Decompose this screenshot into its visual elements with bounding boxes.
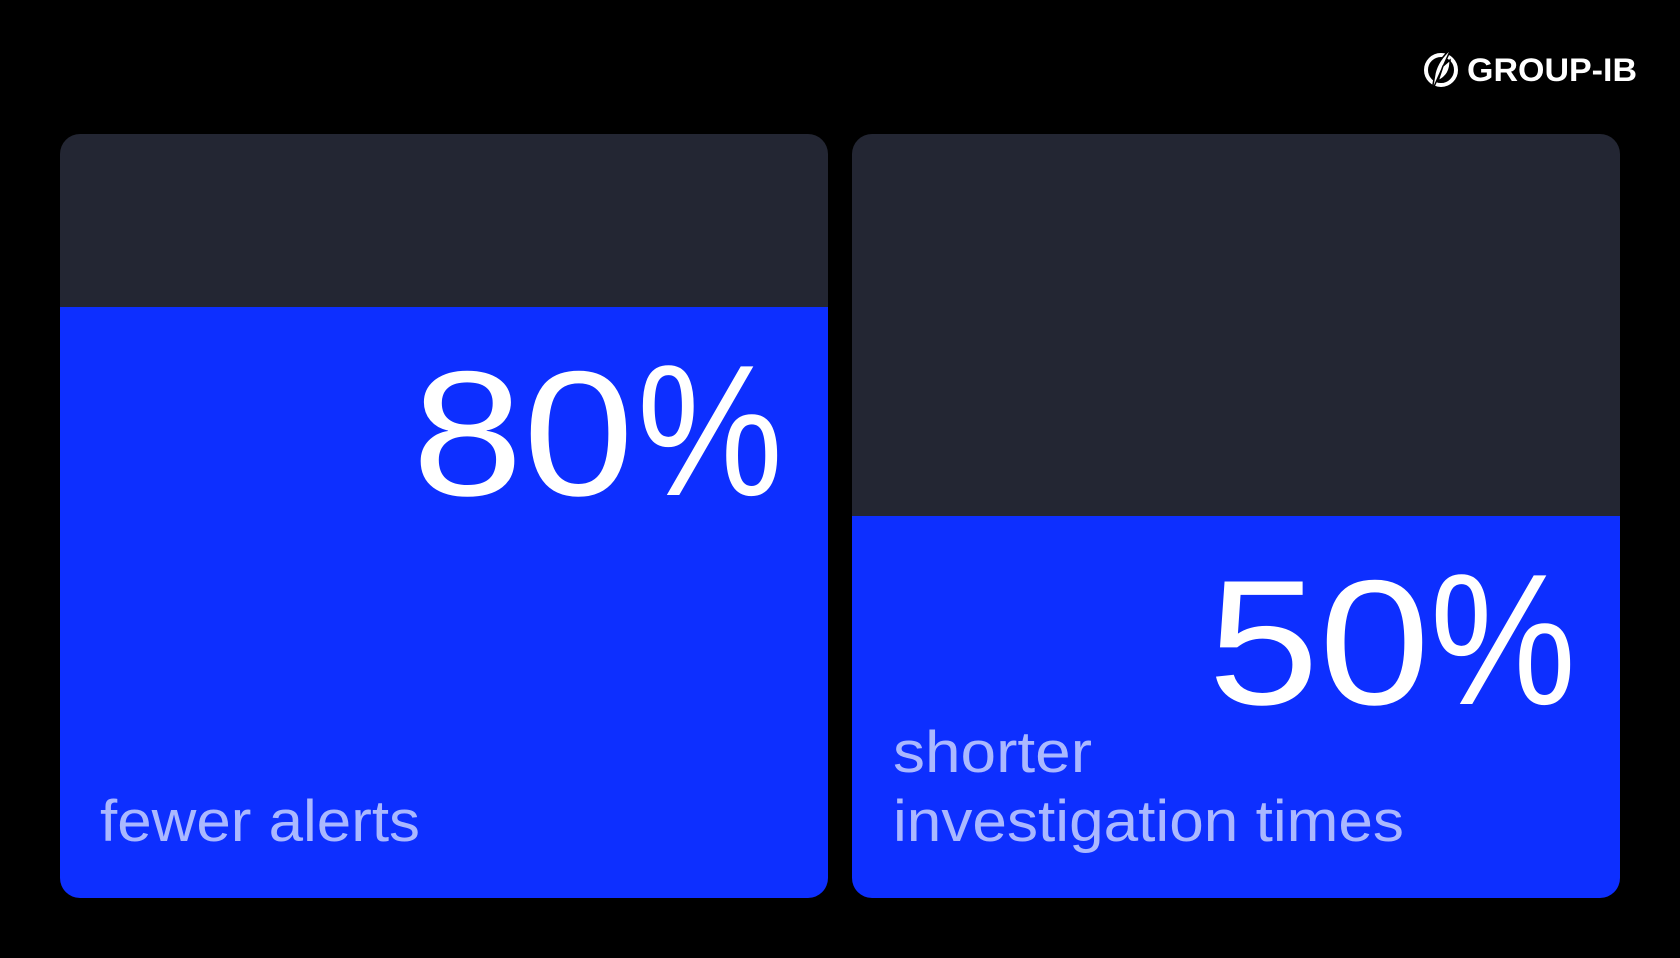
panel track xyxy=(852,134,1620,516)
big number 50%: % xyxy=(1430,535,1576,744)
panel track xyxy=(60,134,828,307)
bar fill 80% xyxy=(60,307,828,898)
label: fewer alerts: fewer alerts xyxy=(100,789,420,854)
big number 80% xyxy=(412,326,783,535)
label: shorter investigation times xyxy=(893,720,1404,854)
logo: Group-IB xyxy=(1426,49,1637,91)
icon: logo mark xyxy=(1426,49,1456,91)
big number 50%: 50 xyxy=(1208,543,1430,742)
label: shorter investigation times: investigation times xyxy=(893,789,1404,854)
big number 50% xyxy=(1208,535,1576,744)
panel: shorter investigation times xyxy=(852,134,1620,898)
panel: fewer alerts xyxy=(60,134,828,898)
logo wordmark: GROUP-IB xyxy=(1467,52,1637,88)
big number 80%: % xyxy=(637,326,783,535)
label: shorter investigation times: shorter xyxy=(893,720,1092,785)
bar fill 50% xyxy=(852,516,1620,898)
big number 80%: 80 xyxy=(412,334,634,533)
